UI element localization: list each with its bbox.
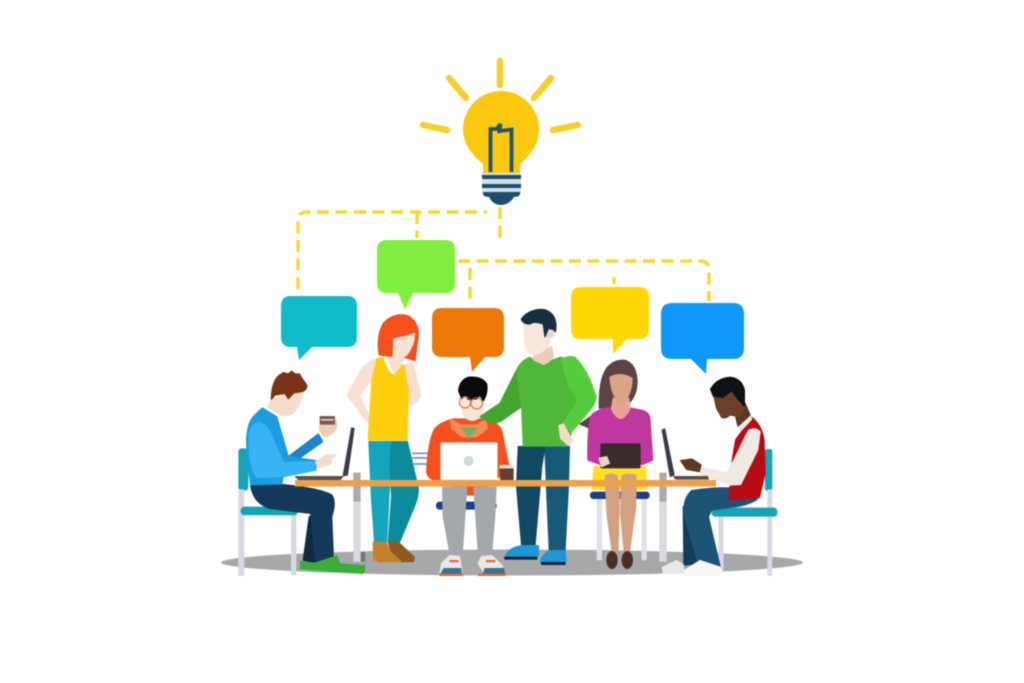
- person: woman in yellow top standing: [347, 315, 421, 562]
- person: man with glasses seated centre, upper body: [412, 377, 514, 509]
- icon: light bulb: [423, 61, 578, 205]
- laptop: right: [662, 429, 708, 479]
- speech bubble: orange: [432, 308, 504, 372]
- speech bubble: green: [377, 240, 455, 309]
- dashed connector lines: [298, 207, 709, 304]
- speech bubble: yellow: [571, 287, 649, 354]
- person: man in blue shirt on chair: [239, 371, 365, 575]
- table leg: left: [353, 473, 365, 562]
- person: man in green sweater standing: [480, 309, 596, 564]
- table top: [295, 480, 716, 486]
- speech bubble: blue: [661, 303, 744, 374]
- man with glasses: legs and sneakers: [440, 487, 505, 575]
- floor shadow: [221, 550, 803, 576]
- table leg: right: [659, 473, 667, 562]
- speech bubble: teal: [281, 296, 357, 360]
- laptop: left: [296, 428, 354, 480]
- man with glasses: laptop: [441, 443, 497, 480]
- person: woman in purple top with tablet: [580, 360, 653, 568]
- person: man in red vest on chair: [662, 377, 777, 575]
